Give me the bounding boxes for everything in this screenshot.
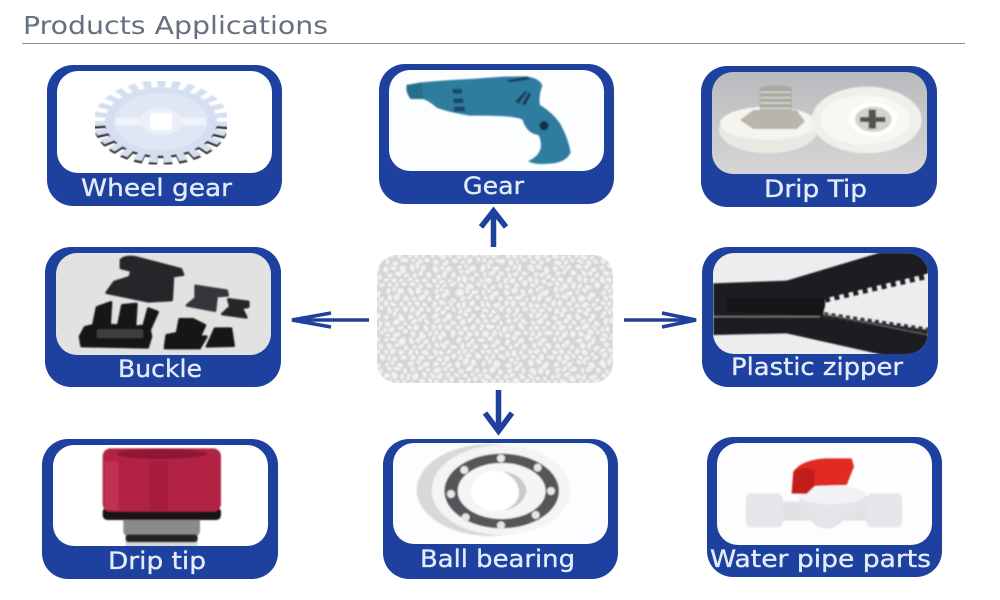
icon: white gear	[101, 85, 221, 161]
icon: white valve with red handle	[746, 458, 902, 528]
icon: ceramic ball bearing	[417, 444, 570, 536]
icon: blue electric drill	[406, 76, 571, 164]
title: Products Applications	[23, 11, 328, 40]
arrow: up to gear	[481, 211, 506, 247]
label: wheel gear: Wheel gear	[81, 174, 232, 202]
label: drip tip: Drip Tip	[764, 175, 867, 203]
panel: ball bearing	[383, 439, 618, 579]
panel: drip tip (white roller wheels)	[701, 66, 937, 207]
label: drip tip: Drip tip	[108, 547, 206, 575]
panel: wheel gear	[47, 65, 282, 206]
label: ball bearing: Ball bearing	[420, 545, 575, 573]
icon: white roller wheels with bolt	[719, 85, 922, 153]
label: gear: Gear	[463, 172, 524, 200]
label: buckle: Buckle	[118, 355, 202, 383]
arrow: right to plastic zipper	[624, 313, 696, 327]
icon: black plastic zipper	[713, 253, 928, 355]
panel: plastic zipper	[702, 247, 938, 387]
panel: gear (drill)	[379, 64, 614, 204]
panel: buckle	[45, 247, 281, 387]
panel: drip tip (red)	[42, 439, 278, 579]
panel: water pipe parts	[707, 437, 942, 577]
arrow: down to ball bearing	[485, 390, 512, 431]
panel: central plastic granules	[377, 255, 613, 383]
icon: black plastic buckles	[80, 257, 248, 348]
label: water pipe parts: Water pipe parts	[710, 545, 931, 573]
icon: red drip tip	[103, 448, 221, 548]
label: plastic zipper: Plastic zipper	[731, 353, 903, 381]
arrow: left to buckle	[292, 313, 369, 327]
